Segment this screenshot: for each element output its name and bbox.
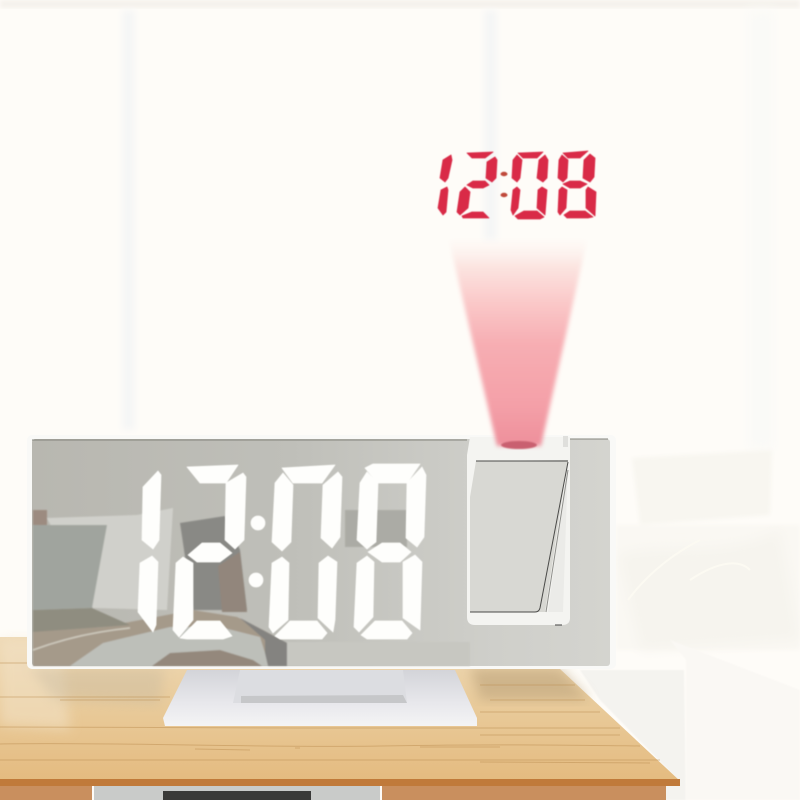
table: front apron and drawer bbox=[0, 786, 666, 800]
projected time 12:08 bbox=[438, 151, 596, 219]
clock mirror face with room reflection bbox=[32, 439, 610, 666]
clock display time 12:08 bbox=[138, 464, 426, 639]
reflection: pillows and bed bbox=[33, 508, 470, 666]
clock body frame bbox=[27, 435, 616, 669]
projection light beam bbox=[449, 240, 587, 449]
projector window bbox=[467, 436, 570, 625]
background: faded bed and nightstand bbox=[580, 450, 800, 800]
table: wooden tabletop bbox=[0, 637, 680, 786]
clock stand bbox=[163, 670, 477, 726]
